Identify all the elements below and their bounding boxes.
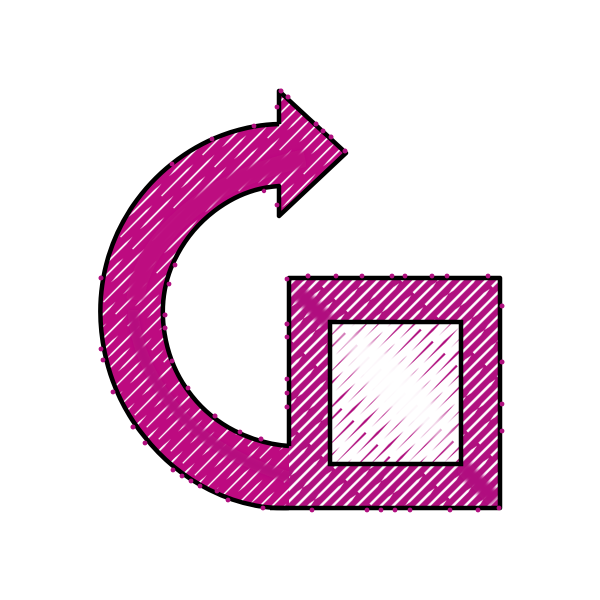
arrow body [100,91,346,508]
inner square window [329,322,461,464]
scribble dots along outline [98,88,504,512]
icon: square with curved arrow [98,88,504,512]
square frame [270,278,500,508]
